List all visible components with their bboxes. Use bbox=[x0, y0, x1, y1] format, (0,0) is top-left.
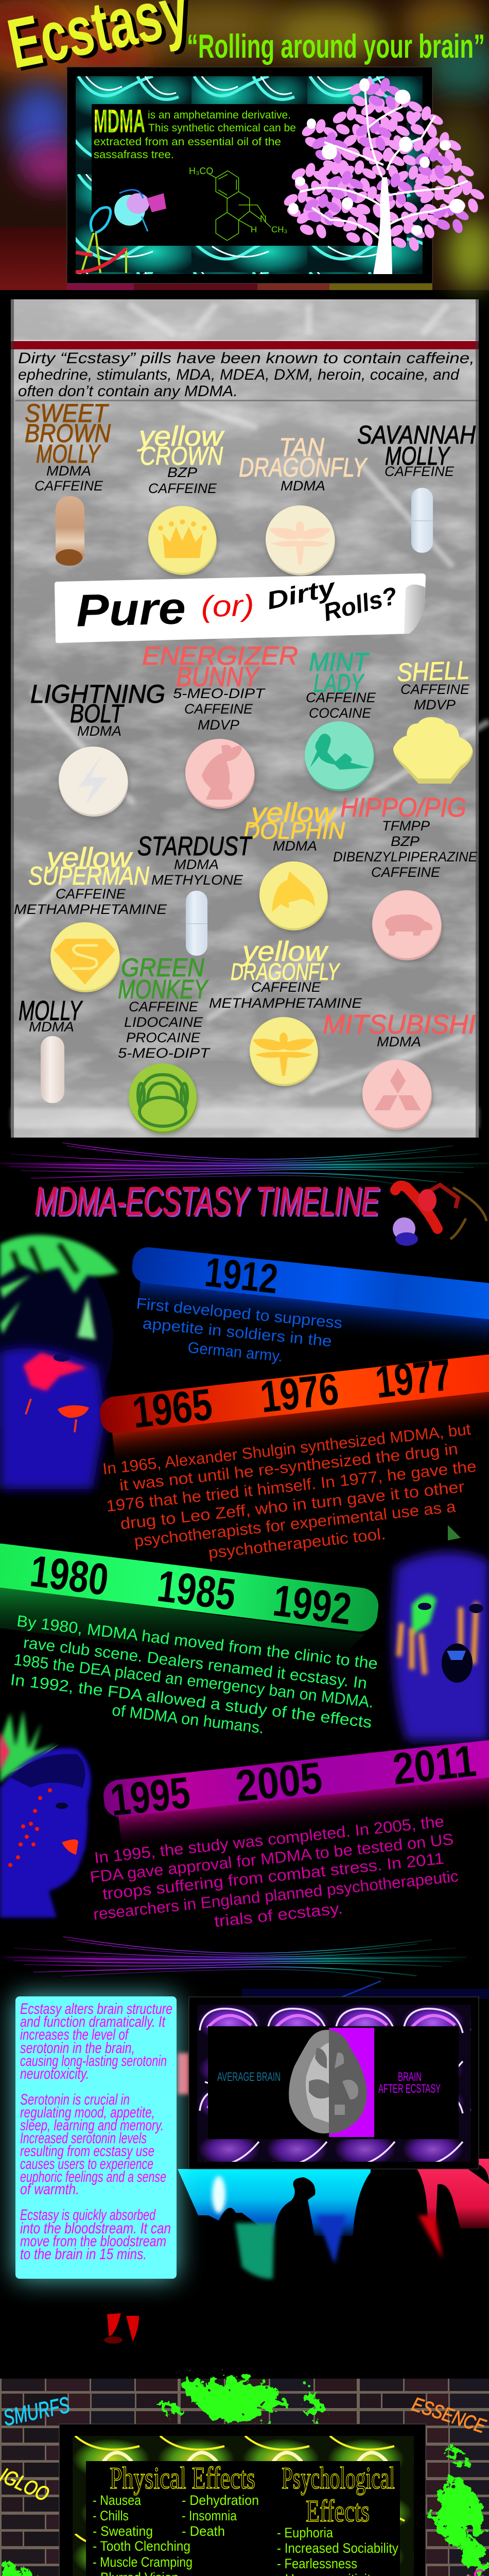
note: Pure or Dirty Rolls: Dirty bbox=[264, 573, 339, 615]
1980 text bbox=[9, 1612, 379, 1737]
pill: shell bbox=[393, 656, 473, 784]
physical effects list: - Muscle Cramping bbox=[93, 2554, 193, 2570]
pill: shell: SHELL bbox=[396, 656, 470, 687]
pill: sweet brown molly: CAFFEINE bbox=[34, 478, 103, 494]
panel: brain info: causes users to experience bbox=[20, 2156, 153, 2173]
1912 text bbox=[135, 1295, 343, 1365]
panel: brain comparison bbox=[189, 1997, 479, 2169]
molecule diagram: CH₃ bbox=[271, 225, 287, 234]
panel: brain info: serotonin in the brain, bbox=[20, 2040, 135, 2057]
molecule diagram: H₃CO bbox=[189, 166, 213, 176]
1965 text bbox=[102, 1420, 477, 1562]
pill: sweet brown molly: MOLLY bbox=[36, 439, 101, 468]
pill: shell: CAFFEINE bbox=[400, 682, 470, 697]
pill: energizer bunny: ENERGIZER bbox=[142, 641, 298, 670]
pill: yellow superman: SUPERMAN bbox=[28, 861, 150, 890]
title: Ecstasy bbox=[2, 0, 199, 87]
1912 text: German army. bbox=[187, 1339, 284, 1365]
pill: yellow crown: CAFFEINE bbox=[148, 481, 217, 496]
molecule diagram: N bbox=[260, 214, 267, 224]
pill: mint lady: COCAINE bbox=[309, 705, 372, 721]
pill: energizer bunny: 5-MEO-DIPT bbox=[173, 686, 266, 701]
pill: green monkey bbox=[118, 953, 211, 1136]
1995 text bbox=[89, 1812, 459, 1930]
panel: brain info: Serotonin is crucial in bbox=[20, 2091, 130, 2108]
panel: brain info: increases the level of bbox=[20, 2026, 129, 2043]
pill: savannah molly: CAFFEINE bbox=[385, 464, 455, 479]
pill: hippo pig: TFMPP bbox=[382, 818, 430, 834]
psychological effects list: - Fearlessness bbox=[277, 2556, 357, 2571]
pill: hippo pig: CAFFEINE bbox=[371, 865, 441, 880]
physical effects list: - Chills bbox=[93, 2508, 129, 2523]
pill: green monkey: GREEN bbox=[121, 953, 205, 982]
panel: brain info: move from the bloodstream bbox=[20, 2233, 166, 2250]
intro text bbox=[94, 109, 296, 161]
pill: yellow crown bbox=[137, 421, 224, 577]
pill: yellow dragonfly bbox=[209, 936, 362, 1088]
pill: green monkey: CAFFEINE bbox=[129, 999, 199, 1014]
pill: molly: MOLLY bbox=[19, 995, 83, 1026]
1980 text: In 1992, the FDA allowed a study of the effects bbox=[9, 1670, 373, 1732]
pill: yellow crown: CROWN bbox=[140, 442, 223, 470]
1995 text: trials of ecstasy. bbox=[213, 1899, 344, 1930]
icon: pacifier bbox=[76, 190, 166, 273]
timeline: 1965 1976 1977: 1965 bbox=[130, 1380, 215, 1438]
molecule diagram: H bbox=[251, 225, 257, 234]
heading: psychological effects: Psychological bbox=[282, 2461, 395, 2495]
pill: sweet brown molly bbox=[25, 399, 111, 566]
image: club crowd bbox=[104, 1981, 489, 2344]
pill: yellow dragonfly: DRAGONFLY bbox=[231, 958, 340, 985]
pill: yellow dolphin: DOLPHIN bbox=[243, 817, 345, 844]
pill: lightning bolt bbox=[30, 680, 165, 819]
pill: yellow dolphin: MDMA bbox=[273, 838, 317, 854]
pill: molly bbox=[19, 995, 83, 1103]
pill: mitsubishi: MITSUBISHI bbox=[323, 1010, 476, 1040]
note: Pure or Dirty Rolls bbox=[55, 573, 426, 643]
panel: brain info: into the bloodstream. It can bbox=[20, 2220, 171, 2237]
note: Pure or Dirty Rolls: Rolls? bbox=[321, 582, 400, 627]
physical effects list: - Nausea bbox=[93, 2493, 142, 2508]
pill: yellow dolphin: yellow bbox=[250, 798, 338, 828]
physical effects list: - Sweating bbox=[93, 2523, 153, 2539]
panel: brain info: Increased serotonin levels bbox=[20, 2130, 147, 2147]
brick wall bbox=[0, 2379, 489, 2576]
physical effects list: - Dehydration bbox=[182, 2493, 259, 2508]
pill: yellow superman bbox=[14, 842, 167, 994]
timeline: 1965 1976 1977 bbox=[98, 1350, 489, 1562]
graffiti street names: SMURFS bbox=[1, 2392, 72, 2431]
1995 text: In 1995, the study was completed. In 2005, the bbox=[93, 1812, 445, 1867]
timeline: 1965 1976 1977: 1977 bbox=[373, 1350, 453, 1408]
bag text bbox=[18, 350, 475, 400]
heading: psychological effects: Effects bbox=[306, 2494, 370, 2528]
panel: brain info: euphoric feelings and a sense bbox=[20, 2168, 166, 2185]
icon: sassafras tree bbox=[282, 77, 486, 274]
icon: brain bbox=[289, 2030, 367, 2134]
note: Pure or Dirty Rolls: Pure bbox=[75, 582, 186, 636]
pill: stardust bbox=[137, 832, 253, 956]
pill: mint lady: LADY bbox=[313, 669, 365, 698]
heading: psychological effects bbox=[282, 2461, 395, 2528]
MDMA heading: MDMA bbox=[94, 103, 145, 140]
1995 text: researchers in England planned psychotherapeutic bbox=[93, 1867, 459, 1923]
pill: yellow superman: CAFFEINE bbox=[56, 886, 126, 902]
icon: red pacifier bbox=[393, 1185, 486, 1246]
pill: lightning bolt: MDMA bbox=[77, 723, 121, 739]
psychological effects list bbox=[277, 2525, 398, 2576]
timeline: 1995 2005 2011: 1995 bbox=[108, 1768, 193, 1825]
heading: physical effects: Physical Effects bbox=[110, 2461, 255, 2495]
pill: hippo pig: DIBENZYLPIPERAZINE bbox=[333, 849, 478, 865]
panel: effects bbox=[59, 2424, 426, 2576]
pill: sweet brown molly: MDMA bbox=[46, 463, 91, 479]
image: girl with mohawk bbox=[0, 1710, 91, 1918]
pill: energizer bunny: BUNNY bbox=[176, 662, 260, 692]
bag text: often don’t contain any MDMA. bbox=[18, 383, 238, 400]
timeline: 1980 1985 1992: 1985 bbox=[154, 1561, 238, 1620]
pill: yellow dragonfly: CAFFEINE bbox=[251, 979, 321, 995]
intro text: This synthetic chemical can be bbox=[148, 122, 296, 134]
1912 text: First developed to suppress bbox=[135, 1295, 343, 1332]
pill: tan dragonfly: DRAGONFLY bbox=[239, 453, 368, 483]
timeline: 1995 2005 2011: 2011 bbox=[390, 1736, 479, 1794]
1912 text: appetite in soldiers in the bbox=[142, 1315, 333, 1350]
pill: hippo pig: HIPPO/PIG bbox=[340, 793, 466, 823]
timeline: 1995 2005 2011 bbox=[89, 1736, 489, 1930]
pill: energizer bunny bbox=[142, 641, 298, 811]
timeline: 1912 bbox=[131, 1246, 489, 1365]
pill: mint lady: MINT bbox=[309, 648, 370, 676]
pill: yellow dolphin bbox=[243, 798, 345, 933]
psychological effects list: - Euphoria bbox=[277, 2525, 334, 2540]
1965 text: drug to Leo Zeff, who in turn gave it to other bbox=[119, 1478, 465, 1533]
physical effects list: - Insomnia bbox=[182, 2508, 237, 2523]
pill: hippo pig bbox=[333, 793, 478, 962]
1980 text: 1985 the DEA placed an emergency ban on MDMA. bbox=[13, 1651, 375, 1711]
pill: mint lady bbox=[305, 648, 376, 793]
panel: brain info: of warmth. bbox=[20, 2181, 79, 2198]
panel: brain info: Ecstasy is quickly absorbed bbox=[20, 2207, 156, 2224]
physical effects list bbox=[93, 2493, 259, 2576]
image: painted man bbox=[393, 1525, 489, 1740]
panel: zip bag bbox=[11, 299, 489, 1138]
panel: brain info: neurotoxicity. bbox=[20, 2065, 89, 2082]
1995 text: FDA gave approval for MDMA to be tested on US bbox=[89, 1830, 455, 1886]
pill: lightning bolt: BOLT bbox=[70, 699, 125, 728]
pill: tan dragonfly bbox=[239, 433, 368, 578]
pill: energizer bunny: MDVP bbox=[198, 717, 239, 733]
panel: MDMA intro bbox=[67, 67, 486, 283]
pill: mitsubishi bbox=[323, 1010, 476, 1132]
pill: yellow crown: yellow bbox=[137, 421, 224, 452]
panel: brain info: resulting from ecstasy use bbox=[20, 2143, 154, 2160]
timeline: 1965 1976 1977: 1976 bbox=[258, 1364, 341, 1422]
pill: stardust: MDMA bbox=[174, 857, 219, 872]
pill: yellow superman: yellow bbox=[45, 842, 133, 873]
1980 text: of MDMA on humans. bbox=[111, 1701, 265, 1737]
panel: brain info: and function dramatically. It bbox=[20, 2013, 166, 2030]
pill: yellow dragonfly: METHAMPHETAMINE bbox=[209, 995, 362, 1011]
psychological effects list: - Increased Sociability bbox=[277, 2540, 398, 2556]
pill: green monkey: MONKEY bbox=[118, 975, 209, 1005]
panel: brain comparison: AVERAGE BRAIN bbox=[217, 2070, 281, 2084]
pill: mint lady: CAFFEINE bbox=[306, 690, 376, 705]
bokeh background bbox=[0, 0, 489, 290]
1995 text: troops suffering from combat stress. In 2011 bbox=[101, 1849, 445, 1903]
pill: mitsubishi: MDMA bbox=[377, 1034, 421, 1049]
1980 text: rave club scene. Dealers renamed it ecstasy. In bbox=[23, 1633, 368, 1692]
pill: savannah molly bbox=[357, 420, 476, 553]
timeline: 1912: 1912 bbox=[203, 1249, 280, 1302]
timeline: 1995 2005 2011: 2005 bbox=[233, 1753, 325, 1811]
timeline: 1980 1985 1992: 1992 bbox=[270, 1575, 354, 1634]
pill: tan dragonfly: MDMA bbox=[281, 478, 325, 494]
light streak top bbox=[0, 1143, 489, 1185]
panel: brain info: sleep, learning and memory. bbox=[20, 2117, 164, 2134]
pill: tan dragonfly: TAN bbox=[279, 433, 325, 462]
panel: brain info: causing long-lasting serotonin bbox=[20, 2053, 167, 2070]
pill: shell: MDVP bbox=[414, 697, 456, 713]
pill: green monkey: PROCAINE bbox=[126, 1030, 201, 1045]
intro text: is an amphetamine derivative. bbox=[148, 109, 291, 121]
pill: molly: MDMA bbox=[29, 1019, 74, 1035]
image: girl with green hair bbox=[0, 1235, 118, 1489]
1965 text: it was not until he re-synthesized the drug in bbox=[118, 1439, 459, 1495]
pill: yellow dragonfly: yellow bbox=[240, 936, 328, 967]
panel: brain info: to the brain in 15 mins. bbox=[20, 2246, 147, 2263]
1965 text: In 1965, Alexander Shulgin synthesized MDMA, but bbox=[102, 1420, 472, 1478]
panel: brain info bbox=[15, 1996, 177, 2279]
1965 text: 1976 that he tried it himself. In 1977, he gave the bbox=[106, 1457, 477, 1515]
timeline: 1980 1985 1992: 1980 bbox=[27, 1546, 111, 1605]
physical effects list: - Tooth Clenching bbox=[93, 2538, 190, 2554]
1965 text: psychotherapists for experimental use as a bbox=[133, 1497, 457, 1550]
pill: sweet brown molly: BROWN bbox=[25, 419, 111, 448]
pill: stardust: METHYLONE bbox=[151, 872, 243, 888]
light streak middle bbox=[4, 1937, 466, 1979]
pill: green monkey: LIDOCAINE bbox=[124, 1014, 203, 1030]
pill: green monkey: 5-MEO-DIPT bbox=[118, 1045, 211, 1061]
timeline: 1980 1985 1992 bbox=[0, 1541, 380, 1737]
panel: brain comparison: AFTER ECSTASY bbox=[378, 2082, 441, 2096]
panel: brain info: regulating mood, appetite, bbox=[20, 2104, 155, 2121]
physical effects list: - Death bbox=[182, 2523, 225, 2539]
graffiti street names bbox=[0, 2392, 489, 2576]
panel: brain info: Ecstasy alters brain structure bbox=[20, 2001, 172, 2018]
pill: yellow superman: METHAMPHETAMINE bbox=[14, 902, 167, 917]
1980 text: By 1980, MDMA had moved from the clinic to the bbox=[16, 1612, 379, 1673]
panel: brain comparison: BRAIN bbox=[398, 2070, 422, 2084]
molecule diagram bbox=[189, 166, 287, 241]
intro text: sassafrass tree. bbox=[94, 149, 174, 161]
1965 text: psychotherapeutic tool. bbox=[207, 1524, 387, 1562]
note: Pure or Dirty Rolls: (or) bbox=[201, 589, 254, 623]
pill: energizer bunny: CAFFEINE bbox=[184, 701, 253, 717]
pill: lightning bolt: LIGHTNING bbox=[30, 680, 165, 708]
green paint splatter bbox=[2, 2378, 489, 2576]
pill: yellow crown: BZP bbox=[167, 465, 197, 480]
bag text: ephedrine, stimulants, MDA, MDEA, DXM, heroin, cocaine, and bbox=[18, 366, 460, 383]
pill: sweet brown molly: SWEET bbox=[25, 399, 109, 428]
pill: stardust: STARDUST bbox=[137, 832, 253, 861]
pill: savannah molly: MOLLY bbox=[385, 442, 451, 470]
bag text: Dirty “Ecstasy” pills have been known to contain caffeine, bbox=[18, 350, 475, 367]
pill: hippo pig: BZP bbox=[391, 834, 420, 849]
intro text: extracted from an essential oil of the bbox=[94, 136, 281, 148]
